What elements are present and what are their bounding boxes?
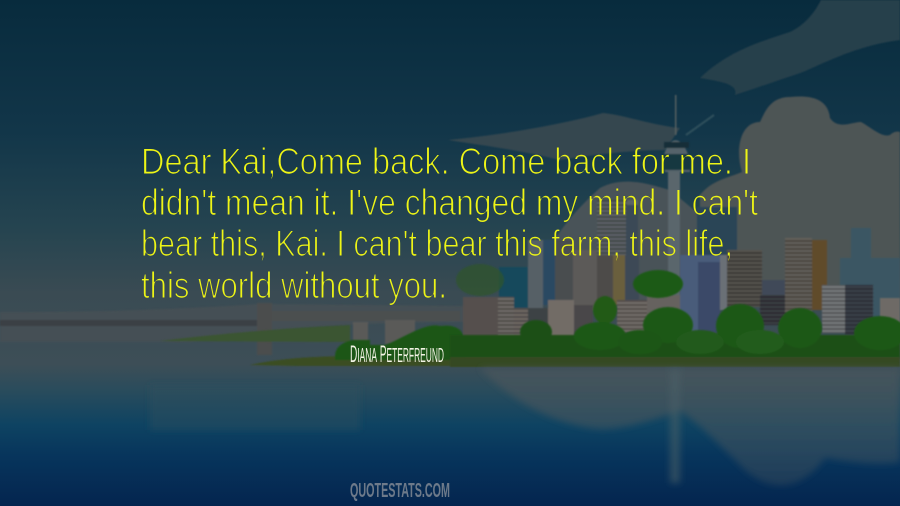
- skyline buildings: [463, 200, 900, 342]
- large cloud right: [700, 96, 900, 300]
- green shore left of the skyline: [160, 325, 500, 366]
- quote line 2: didn't mean it. I've changed my mind. I can't: [141, 182, 759, 223]
- distant blue skyline at right: [840, 228, 900, 318]
- quote text: [141, 141, 759, 306]
- reflection of clouds and skyline: [150, 368, 900, 485]
- back row: [597, 200, 638, 305]
- quote line 1: Dear Kai,Come back. Come back for me. I: [141, 141, 751, 182]
- trees along the shore: [450, 264, 900, 358]
- high wispy cloud: [700, 0, 900, 95]
- quote line 4: this world without you.: [141, 265, 447, 306]
- clouds behind skyline: [448, 96, 900, 300]
- shore strip: [450, 357, 900, 367]
- author name: DIANA PETERFREUND: [350, 341, 444, 368]
- quote line 3: bear this, Kai. I can't bear this farm, this life,: [141, 223, 733, 264]
- teal tower: [499, 267, 528, 308]
- bridge in the distance: [0, 303, 470, 355]
- watermark: QUOTESTATS.COM: [350, 480, 450, 502]
- tower: [663, 95, 714, 302]
- cloud band left of tower: [448, 113, 680, 160]
- front row: [463, 297, 498, 342]
- lower cloud left of tower: [530, 182, 700, 300]
